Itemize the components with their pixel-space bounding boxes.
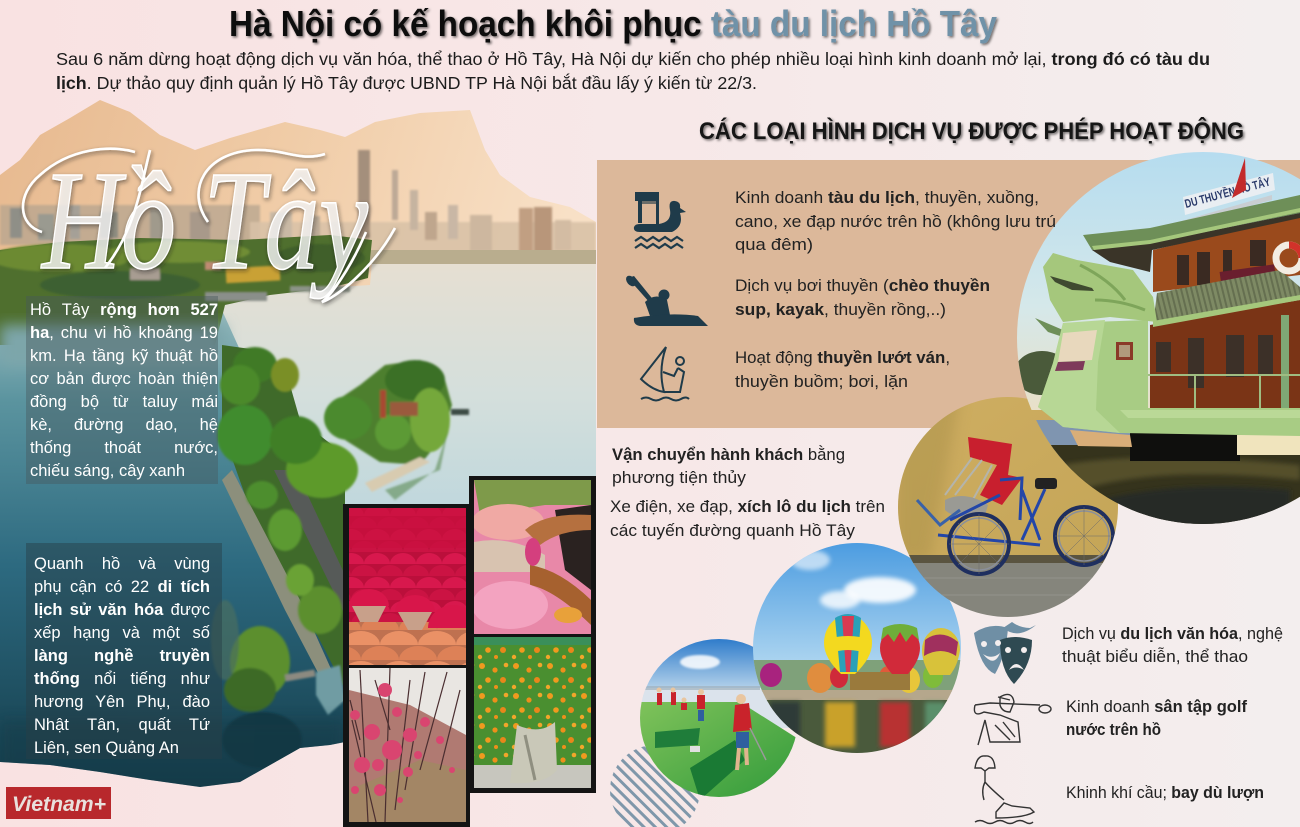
photo: hot air balloons	[750, 540, 965, 755]
text: windsurfing: thuyền buồm; bơi, lặn	[735, 372, 908, 391]
text: culture: thuật biểu diễn, thể thao	[1062, 647, 1248, 666]
cabin window	[1058, 330, 1097, 362]
logo: Vietnam+	[6, 787, 111, 819]
icon: boat with duck	[634, 192, 686, 248]
text: cruise boats	[735, 188, 1056, 254]
text: water transport	[612, 445, 845, 487]
callout: lake size: đồng bộ từ taluy mái	[30, 393, 218, 411]
upper roof	[1083, 195, 1300, 250]
text: water transport: phương tiện thủy	[612, 468, 747, 487]
callout: lake size	[26, 296, 218, 484]
canopy	[968, 437, 1022, 505]
text: water transport: Vận chuyển hành khách bằng	[612, 445, 845, 464]
callout: heritage and craft villages: hương Yên Phụ, đào	[34, 693, 210, 711]
icon: windsurf	[641, 347, 689, 400]
callout: heritage and craft villages: Liên, sen Quảng An	[34, 739, 179, 757]
text: boating: sup, kayak, thuyền rồng,..)	[735, 300, 946, 319]
icon: theatre masks	[974, 622, 1036, 684]
section heading: CÁC LOẠI HÌNH DỊCH VỤ ĐƯỢC PHÉP HOẠT ĐỘNG	[699, 117, 1244, 145]
callout: heritage and craft villages: Nhật Tân, quất Tứ	[34, 716, 210, 734]
logo: Vietnam+: Vietnam+	[12, 793, 106, 816]
lower wall	[1150, 300, 1300, 412]
callout: lake size: kè, đường dạo, hệ	[30, 416, 218, 434]
callout: heritage and craft villages: Quanh hồ và vùng	[34, 555, 210, 573]
photo: Hồ Tây aerial view	[0, 95, 600, 790]
balloons	[760, 663, 782, 687]
sign: DU THUYỀN HỒ TÂY	[1183, 174, 1272, 211]
callout: heritage and craft villages: thống nổi tiếng như	[34, 670, 210, 688]
text: culture: Dịch vụ du lịch văn hóa, nghệ	[1062, 624, 1283, 643]
text: cruise boats: qua đêm)	[735, 235, 813, 254]
callout: heritage and craft villages	[26, 543, 222, 759]
text: land transport: Xe điện, xe đạp, xích lô du lịch trên	[610, 497, 885, 516]
icon: parasailing	[975, 756, 1034, 824]
text: culture	[1062, 624, 1283, 666]
callout: lake size: ha, chu vi hồ khoảng 19	[30, 324, 218, 342]
film strip left	[343, 504, 470, 827]
wheels	[949, 514, 1009, 574]
text: windsurfing	[735, 348, 950, 391]
far shore trees	[0, 235, 372, 345]
mid roof	[1153, 270, 1300, 325]
sign	[1178, 158, 1275, 224]
callout: lake size: cơ bản được hoàn thiện	[30, 370, 218, 388]
collage: craft village photos	[343, 476, 596, 827]
photo: lotus tea	[472, 480, 591, 634]
script title: Hồ Tây: Hồ Tây	[40, 141, 369, 299]
photo: cyclo	[895, 395, 1120, 620]
text: cruise boats: Kinh doanh tàu du lịch, thuyền, xuồng,	[735, 188, 1039, 207]
photo: dragon boat restaurant	[1014, 150, 1300, 530]
lower island	[211, 600, 345, 768]
icon: kayak	[624, 274, 708, 326]
callout: heritage and craft villages: làng nghề truyền	[34, 647, 210, 665]
callout: lake size: chiếu sáng, cây xanh	[30, 462, 185, 480]
callout: heritage and craft villages: phụ cận có 22 di tích	[34, 578, 210, 596]
seat	[945, 496, 988, 517]
intro text: Sau 6 năm dừng hoạt động dịch vụ văn hóa, thể thao ở Hồ Tây, Hà Nội dự kiến cho phép nhiều loại hình kinh doanh mở lại, trong đó có tàu du	[56, 49, 1210, 69]
panel: permitted services	[597, 160, 1300, 428]
shoreline trees and road	[222, 345, 345, 690]
text: land transport: các tuyến đường quanh Hồ Tây	[610, 521, 856, 540]
icon: golfer	[974, 694, 1051, 745]
text: cruise boats: cano, xe đạp nước trên hồ (không lưu trú	[735, 212, 1056, 231]
text: golf	[1066, 697, 1247, 739]
text: windsurfing: Hoạt động thuyền lướt ván,	[735, 348, 950, 367]
decorative stripes circle	[610, 745, 700, 827]
hull underside	[1130, 433, 1240, 461]
text: land transport	[610, 497, 885, 540]
text: golf: Kinh doanh sân tập golf	[1066, 697, 1247, 716]
intro text: lịch. Dự thảo quy định quản lý Hồ Tây được UBND TP Hà Nội bắt đầu lấy ý kiến từ 22/3.	[56, 73, 757, 93]
callout: lake size: thống thoát nước,	[30, 439, 218, 457]
text: boating: Dịch vụ bơi thuyền (chèo thuyền	[735, 276, 990, 295]
text: golf: nước trên hồ	[1066, 720, 1161, 739]
callout: lake size: km. Hạ tầng kỹ thuật hồ	[30, 347, 218, 365]
film strip right	[469, 476, 596, 793]
photo: incense	[349, 508, 478, 665]
intro text	[56, 49, 1210, 93]
title: Hà Nội có kế hoạch khôi phục tàu du lịch Hồ Tây	[229, 3, 997, 44]
photo: peach blossom	[349, 668, 466, 822]
upper wall	[1153, 215, 1300, 292]
callout: heritage and craft villages: lịch sử văn hóa được	[34, 601, 210, 619]
life buoy	[1276, 245, 1300, 271]
photo: kumquat tree	[474, 637, 591, 788]
pagoda island	[324, 360, 469, 500]
callout: heritage and craft villages: xếp hạng và một số	[34, 624, 210, 642]
callout: lake size: Hồ Tây rộng hơn 527	[30, 301, 218, 319]
text: boating	[735, 276, 990, 319]
photo: golf practice	[640, 639, 800, 800]
text: balloons and paragliding: Khinh khí cầu; bay dù lượn	[1066, 783, 1264, 802]
dragon head	[1043, 253, 1157, 322]
hull	[1038, 320, 1300, 436]
